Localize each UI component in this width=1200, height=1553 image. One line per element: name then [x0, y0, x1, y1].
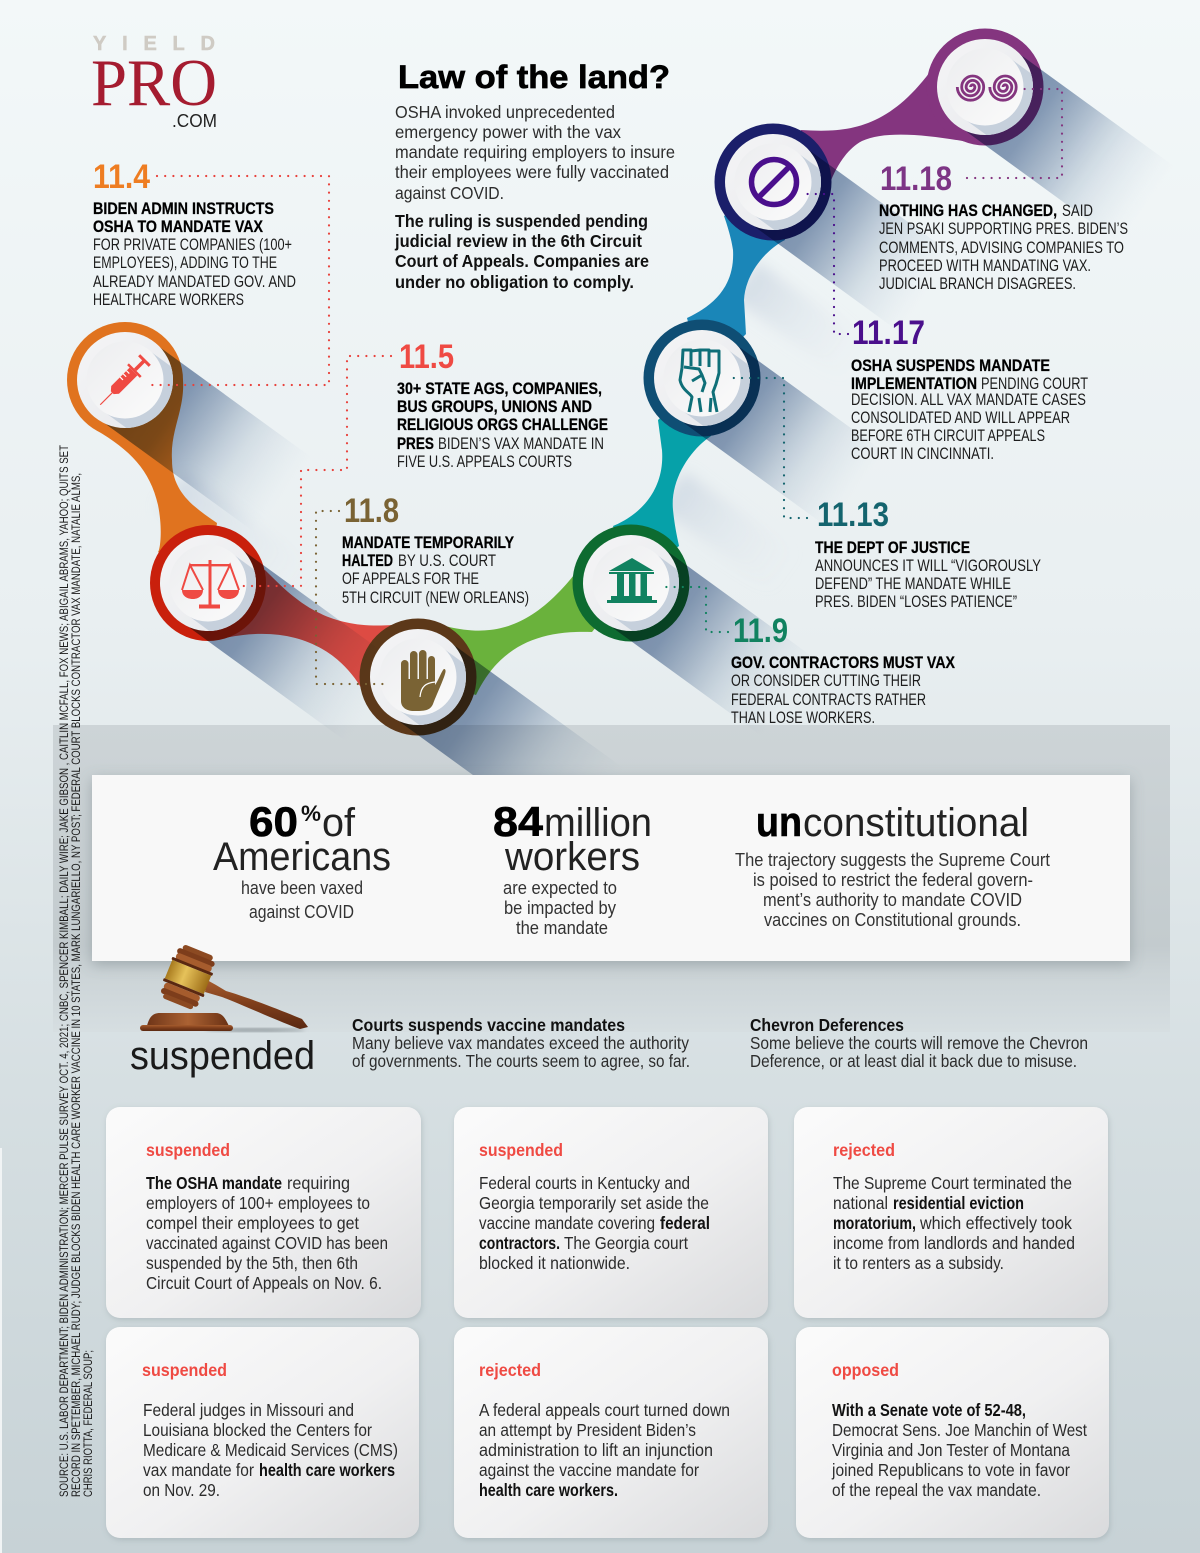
- card: OSHA mandate suspended: Circuit Court of Appeals on Nov. 6.: [146, 1273, 382, 1293]
- stat: unconstitutional: [735, 798, 1050, 930]
- card: federal contractors suspended: vaccine mandate covering: [479, 1213, 655, 1233]
- ruling text: [394, 211, 649, 292]
- text 11.18: JEN PSAKI SUPPORTING PRES. BIDEN’S: [879, 220, 1128, 238]
- card: eviction moratorium rejected: which effectively took: [919, 1213, 1072, 1233]
- text 11.17: PENDING COURT: [981, 375, 1088, 393]
- stat: 84 million: 84: [493, 798, 544, 845]
- card: federal contractors suspended: suspended: [479, 1140, 563, 1160]
- connector 11.9: [660, 587, 728, 632]
- date 11.9: 11.9: [733, 612, 788, 650]
- connector 11.4: [146, 176, 329, 385]
- text 11.13: DEFEND” THE MANDATE WHILE: [815, 575, 1011, 593]
- text 11.4: ALREADY MANDATED GOV. AND: [93, 273, 296, 291]
- text 11.17: BEFORE 6TH CIRCUIT APPEALS: [851, 427, 1045, 445]
- intro text: emergency power with the vax: [395, 122, 621, 142]
- card: CMS mandate suspended: on Nov. 29.: [143, 1480, 220, 1500]
- text 11.13: [815, 539, 1041, 611]
- card: CMS mandate suspended: Medicare & Medicaid Services (CMS): [143, 1440, 398, 1460]
- icon: hand: [370, 629, 497, 749]
- text 11.8: OF APPEALS FOR THE: [342, 570, 479, 588]
- card: OSHA mandate suspended: suspended: [146, 1140, 230, 1160]
- text 11.18: NOTHING HAS CHANGED,: [879, 202, 1057, 220]
- logo: YIELD: [93, 33, 215, 55]
- card: federal contractors suspended: blocked it nationwide.: [479, 1253, 630, 1273]
- card: eviction moratorium rejected: rejected: [833, 1140, 895, 1160]
- connector 11.17: [803, 194, 848, 334]
- ribbon shadows: [159, 262, 871, 602]
- connector 11.13: [727, 378, 807, 518]
- stat: 60 percent: 60: [249, 798, 298, 845]
- title: Law of the land?: [398, 59, 670, 95]
- stat: 84 million: [493, 798, 652, 938]
- card: eviction moratorium rejected: moratorium,: [833, 1213, 916, 1233]
- text 11.17: OSHA SUSPENDS MANDATE: [851, 357, 1050, 375]
- card: federal contractors suspended: contractors.: [479, 1233, 560, 1253]
- text 11.4: EMPLOYEES), ADDING TO THE: [93, 254, 277, 272]
- text 11.9: FEDERAL CONTRACTS RATHER: [731, 691, 926, 709]
- source credits: CHRIS RIOTTA, FEDERAL SOUP;: [83, 1350, 95, 1497]
- card: CMS mandate suspended: health care workers: [259, 1460, 395, 1480]
- word: suspended: suspended: [130, 1034, 315, 1078]
- icon: prohibition sign: [725, 134, 852, 254]
- icon: gavel: [140, 942, 308, 1032]
- card: injunction rejected: [454, 1327, 768, 1538]
- source credits: RECORD IN SPETEMBER, MICHAEL RUDY; JUDGE BLOCKS BIDEN HEALTH CARE WORKER VACCINE IN 10 STATES, MARK LUNGARIELLO, NY POST; FEDERAL COURT BLOCKS CONTRACTOR VAX MANDATE, NATALIE ALMS,: [71, 473, 83, 1497]
- card: OSHA mandate suspended: compel their employees to get: [146, 1213, 359, 1233]
- text 11.18: PROCEED WITH MANDATING VAX.: [879, 257, 1091, 275]
- stat: unconstitutional: The trajectory suggests the Supreme Court: [735, 850, 1050, 870]
- date 11.17: 11.17: [852, 314, 925, 352]
- text: courts suspends: Many believe vax mandates exceed the authority: [352, 1033, 689, 1053]
- text 11.5: FIVE U.S. APPEALS COURTS: [397, 453, 572, 471]
- card: senate vote opposed: With a Senate vote of 52-48,: [832, 1400, 1026, 1420]
- text 11.17: COURT IN CINCINNATI.: [851, 445, 994, 463]
- long shadows: [97, 49, 1174, 844]
- card: eviction moratorium rejected: residential eviction: [893, 1193, 1024, 1213]
- ruling text: The ruling is suspended pending: [395, 211, 648, 231]
- stat: 84 million: million: [544, 801, 652, 845]
- card: senate vote opposed: Virginia and Jon Tester of Montana: [832, 1440, 1070, 1460]
- grey band behind statistics: [53, 725, 1170, 1032]
- card: CMS mandate suspended: Federal judges in Missouri and: [143, 1400, 354, 1420]
- card: federal contractors suspended: Georgia temporarily set aside the: [479, 1193, 709, 1213]
- ruling text: Court of Appeals. Companies are: [395, 251, 649, 271]
- card: senate vote opposed: [796, 1327, 1109, 1538]
- text 11.5: [397, 380, 608, 471]
- card: eviction moratorium rejected: national: [833, 1193, 888, 1213]
- intro text: their employees were fully vaccinated: [395, 162, 669, 182]
- card: OSHA mandate suspended: suspended by the 5th, then 6th: [146, 1253, 358, 1273]
- card: eviction moratorium rejected: it to renters as a subsidy.: [833, 1253, 1004, 1273]
- text 11.9: GOV. CONTRACTORS MUST VAX: [731, 654, 955, 672]
- text 11.5: BUS GROUPS, UNIONS AND: [397, 398, 592, 416]
- stat: 60 percent: %: [301, 801, 321, 826]
- text 11.17: IMPLEMENTATION: [851, 375, 977, 393]
- text: chevron deferences: [750, 1015, 1088, 1071]
- text 11.18: COMMENTS, ADVISING COMPANIES TO: [879, 239, 1124, 257]
- card: federal contractors suspended: The Georgia court: [564, 1233, 688, 1253]
- text 11.9: THAN LOSE WORKERS.: [731, 709, 875, 727]
- stat: 60 percent: have been vaxed: [241, 878, 363, 898]
- card: senate vote opposed: of the repeal the vax mandate.: [832, 1480, 1041, 1500]
- card: OSHA mandate suspended: [106, 1107, 421, 1318]
- stat: 84 million: are expected to: [503, 878, 617, 898]
- card: federal contractors suspended: federal: [660, 1213, 710, 1233]
- icon: scales: [160, 535, 287, 655]
- text 11.4: [93, 200, 296, 309]
- card: injunction rejected: A federal appeals court turned down: [479, 1400, 730, 1420]
- intro text: mandate requiring employers to insure: [395, 142, 675, 162]
- text: chevron deferences: Chevron Deferences: [750, 1015, 904, 1035]
- stat: unconstitutional: constitutional: [803, 801, 1029, 845]
- card: federal contractors suspended: [454, 1107, 768, 1318]
- date 11.13: 11.13: [817, 496, 889, 534]
- card: OSHA mandate suspended: The OSHA mandate: [146, 1173, 282, 1193]
- stat: 60 percent: of: [322, 801, 356, 845]
- icon: spirals: [937, 39, 1064, 159]
- stat: unconstitutional: ment’s authority to mandate COVID: [763, 890, 1022, 910]
- text 11.5: BIDEN’S VAX MANDATE IN: [438, 435, 604, 453]
- text 11.18: SAID: [1062, 202, 1093, 220]
- card: injunction rejected: against the vaccine mandate for: [479, 1460, 699, 1480]
- text 11.8: HALTED: [342, 552, 393, 570]
- card: CMS mandate suspended: [106, 1327, 419, 1538]
- intro text: OSHA invoked unprecedented: [395, 102, 615, 122]
- text 11.5: PRES: [397, 435, 434, 453]
- text: courts suspends: [352, 1015, 690, 1071]
- card: senate vote opposed: joined Republicans to vote in favor: [831, 1460, 1070, 1480]
- text 11.8: MANDATE TEMPORARILY: [342, 534, 514, 552]
- card: CMS mandate suspended: Louisiana blocked the Centers for: [143, 1420, 372, 1440]
- card: OSHA mandate suspended: requiring: [287, 1173, 350, 1193]
- stat: 60 percent: Americans: [213, 835, 391, 879]
- card: federal contractors suspended: Federal courts in Kentucky and: [479, 1173, 690, 1193]
- card: CMS mandate suspended: suspended: [142, 1360, 227, 1380]
- card: OSHA mandate suspended: employers of 100+ employees to: [146, 1193, 370, 1213]
- text 11.4: HEALTHCARE WORKERS: [93, 291, 244, 309]
- date 11.4: 11.4: [93, 158, 150, 196]
- stat: 84 million: be impacted by: [504, 898, 616, 918]
- stat: 60 percent: against COVID: [249, 902, 354, 922]
- text 11.17: DECISION. ALL VAX MANDATE CASES: [851, 391, 1086, 409]
- card: senate vote opposed: Democrat Sens. Joe Manchin of West: [832, 1420, 1087, 1440]
- text: courts suspends: of governments. The courts seem to agree, so far.: [352, 1051, 690, 1071]
- stat: unconstitutional: un: [756, 798, 802, 845]
- text 11.9: [731, 654, 955, 727]
- text 11.5: RELIGIOUS ORGS CHALLENGE: [397, 416, 608, 434]
- connector 11.18: [967, 89, 1062, 178]
- card: injunction rejected: an attempt by President Biden’s: [479, 1420, 696, 1440]
- panel: statistics card: [92, 775, 1130, 961]
- text 11.13: THE DEPT OF JUSTICE: [815, 539, 970, 557]
- card: injunction rejected: rejected: [479, 1360, 541, 1380]
- text 11.4: FOR PRIVATE COMPANIES (100+: [93, 236, 292, 254]
- stat: unconstitutional: vaccines on Constitutional grounds.: [764, 910, 1021, 930]
- text 11.18: JUDICIAL BRANCH DISAGREES.: [879, 275, 1076, 293]
- text 11.8: 5TH CIRCUIT (NEW ORLEANS): [342, 589, 529, 607]
- icon: raised fist: [654, 330, 781, 450]
- stat: 84 million: workers: [504, 835, 640, 879]
- date 11.8: 11.8: [344, 492, 399, 530]
- text 11.13: PRES. BIDEN “LOSES PATIENCE”: [815, 593, 1017, 611]
- icon: syringe: [77, 332, 204, 452]
- intro text: [395, 102, 675, 203]
- stat: 60 percent: [213, 798, 391, 922]
- text 11.8: [342, 534, 529, 607]
- card: eviction moratorium rejected: The Supreme Court terminated the: [833, 1173, 1072, 1193]
- card: injunction rejected: health care workers.: [479, 1480, 618, 1500]
- icon: courthouse: [583, 535, 710, 655]
- connector 11.5: [243, 356, 391, 586]
- ruling text: judicial review in the 6th Circuit: [394, 231, 642, 251]
- date 11.18: 11.18: [880, 160, 952, 198]
- text 11.5: 30+ STATE AGS, COMPANIES,: [397, 380, 602, 398]
- intro text: against COVID.: [395, 183, 504, 203]
- logo: PRO: [91, 46, 217, 120]
- date 11.5: 11.5: [399, 338, 454, 376]
- card: eviction moratorium rejected: [794, 1107, 1108, 1318]
- card: OSHA mandate suspended: vaccinated against COVID has been: [146, 1233, 388, 1253]
- source credits: SOURCE: U.S. LABOR DEPARTMENT; BIDEN ADMINISTRATION; MERCER PULSE SURVEY OCT. 4, 2021; CNBC, SPENCER KIMBALL; DAILY WIRE; JAKE GIBSON , CAITLIN MCFALL, FOX NEWS; ABIGAIL ABRAMS, YAHOO; QUITS SET: [59, 445, 71, 1497]
- text 11.18: [879, 202, 1128, 293]
- timeline ribbon: [67, 28, 1044, 736]
- card: CMS mandate suspended: vax mandate for: [143, 1460, 254, 1480]
- text 11.4: OSHA TO MANDATE VAX: [93, 218, 263, 236]
- text 11.13: ANNOUNCES IT WILL “VIGOROUSLY: [815, 557, 1041, 575]
- text: chevron deferences: Deference, or at least dial it back due to misuse.: [750, 1051, 1077, 1071]
- source credits: [59, 445, 95, 1497]
- text 11.8: BY U.S. COURT: [398, 552, 496, 570]
- logo: .COM: [172, 111, 217, 131]
- text 11.17: CONSOLIDATED AND WILL APPEAR: [851, 409, 1070, 427]
- card: senate vote opposed: opposed: [832, 1360, 899, 1380]
- ruling text: under no obligation to comply.: [395, 272, 634, 292]
- connector 11.8: [316, 511, 390, 684]
- text: chevron deferences: Some believe the courts will remove the Chevron: [750, 1033, 1088, 1053]
- text: courts suspends: Courts suspends vaccine mandates: [352, 1015, 625, 1035]
- stat: 84 million: the mandate: [516, 918, 608, 938]
- card: eviction moratorium rejected: income from landlords and handed: [833, 1233, 1075, 1253]
- stat: unconstitutional: is poised to restrict the federal govern-: [753, 870, 1033, 890]
- text 11.4: BIDEN ADMIN INSTRUCTS: [93, 200, 274, 218]
- text 11.9: OR CONSIDER CUTTING THEIR: [731, 672, 921, 690]
- card: injunction rejected: administration to lift an injunction: [479, 1440, 713, 1460]
- text 11.17: [851, 357, 1088, 463]
